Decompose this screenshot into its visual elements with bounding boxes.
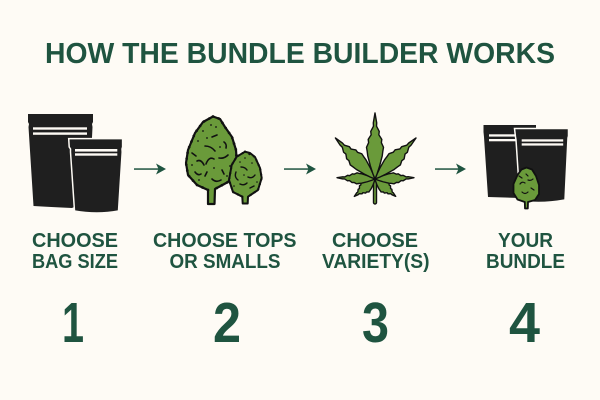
arrow 1 [134,164,166,174]
label: choose bag size: BAG SIZE [32,251,118,273]
small bud [229,152,262,204]
label: your bundle: BUNDLE [486,251,565,273]
title: HOW THE BUNDLE BUILDER WORKS [45,38,555,70]
label: choose varieties: CHOOSE [332,230,418,252]
big bud [186,116,237,204]
label: choose tops or smalls: OR SMALLS [170,251,280,273]
label: choose tops or smalls: CHOOSE TOPS [153,230,296,252]
label: choose bag size: CHOOSE [32,230,118,252]
label: choose tops or smalls [153,230,296,273]
number 1: 1 [62,291,84,355]
label: choose varieties [322,230,430,273]
step 3: choose varieties [322,113,430,355]
step 4: your bundle [484,125,568,355]
icon: two green buds [186,116,262,204]
number 4: 4 [509,291,540,355]
label: your bundle: YOUR [498,230,554,252]
icon: bags with bud [484,125,568,208]
icon: cannabis leaf [330,113,422,204]
arrow 3 [435,164,466,174]
arrow 2 [284,164,316,174]
label: your bundle [486,230,565,273]
number 2: 2 [213,291,241,355]
step 1: choose bag size [28,114,123,355]
number 3: 3 [362,291,389,355]
label: choose varieties: VARIETY(S) [322,251,430,273]
step 2: choose tops or smalls [153,116,296,355]
bud on bags [514,168,539,208]
icon: two black bags [28,114,123,213]
label: choose bag size [32,230,118,273]
